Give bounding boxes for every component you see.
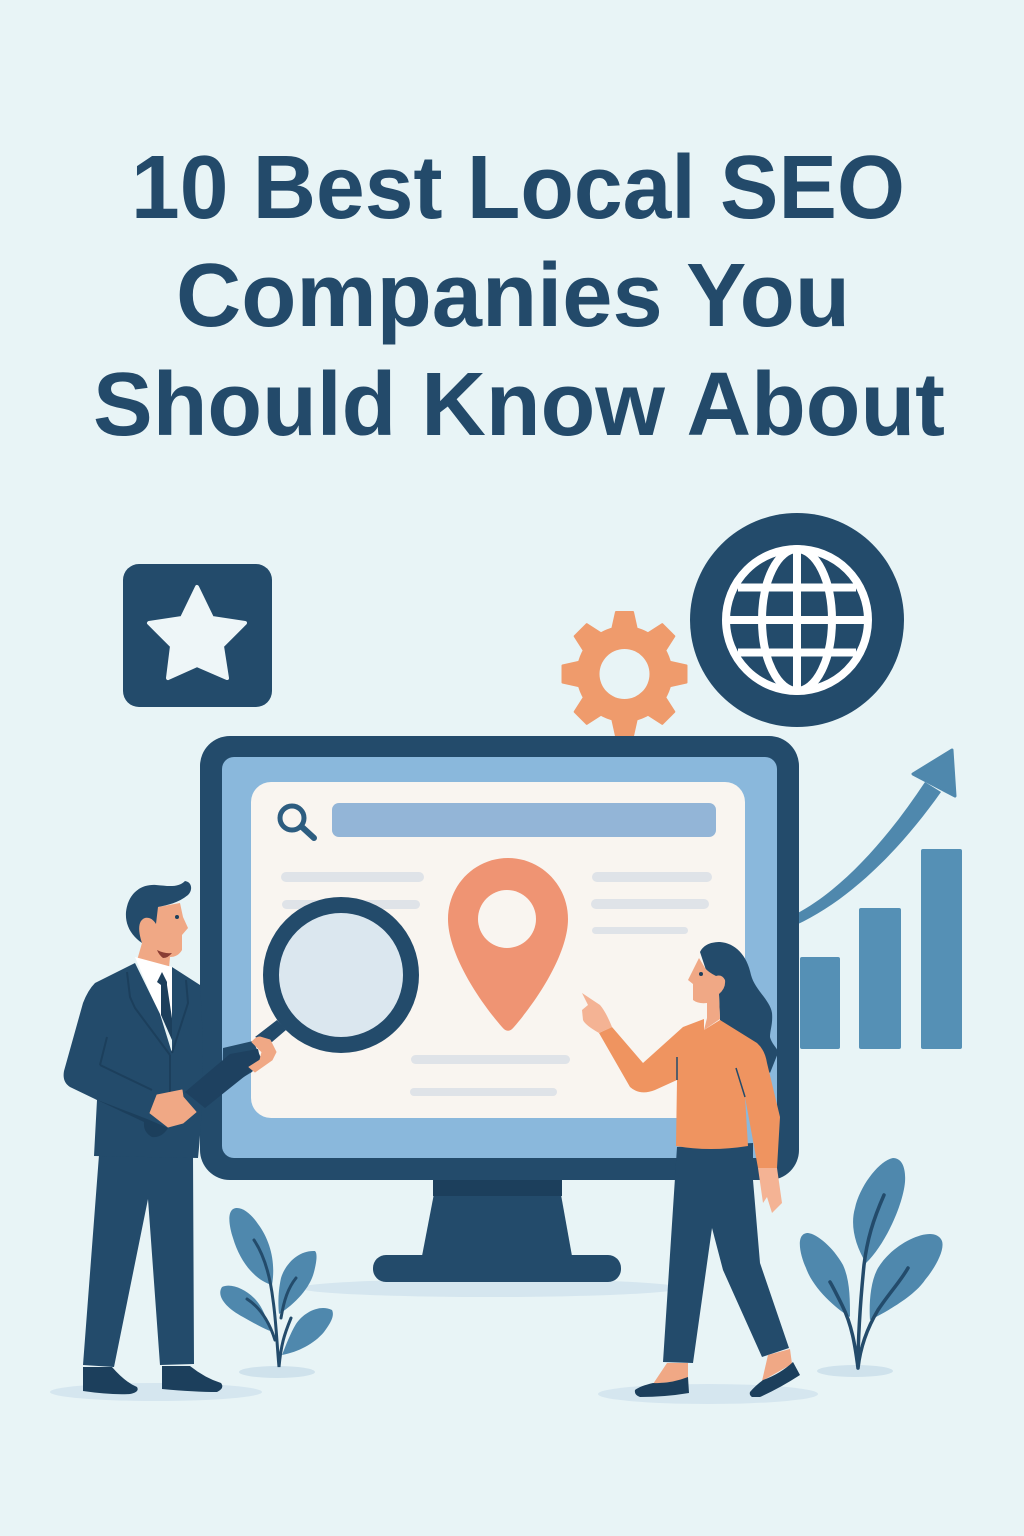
lapels and folds <box>100 972 188 1100</box>
title: Should Know About <box>93 355 945 455</box>
neck and face <box>134 903 188 968</box>
icon: gear <box>562 612 686 736</box>
monitor stand <box>373 1178 621 1282</box>
hair <box>700 942 778 1073</box>
person: man with magnifier <box>50 881 411 1401</box>
title <box>93 138 945 455</box>
title: Companies You <box>176 246 850 346</box>
sleeve cuff <box>95 1099 168 1137</box>
ankles <box>653 1349 792 1384</box>
bar chart <box>800 849 962 1049</box>
browser page <box>251 782 745 1118</box>
sweater folds <box>677 1057 745 1097</box>
person: woman pointing <box>582 942 818 1404</box>
growth arrow <box>796 750 955 925</box>
icon: globe <box>690 513 904 727</box>
eye <box>699 972 703 976</box>
lower hand <box>758 1168 782 1213</box>
plant: left <box>220 1208 333 1378</box>
pointing hand <box>582 993 612 1033</box>
raised hand <box>249 1037 276 1072</box>
icon: map pin <box>448 858 568 1031</box>
search bar <box>332 803 716 837</box>
eye and mouth <box>175 915 179 919</box>
ground shadow <box>50 1383 262 1401</box>
tie <box>157 972 173 1040</box>
monitor screen <box>222 757 777 1158</box>
hair <box>126 881 191 943</box>
shirt <box>135 957 173 1025</box>
face and neck <box>688 958 725 1030</box>
icon: star badge <box>123 564 272 707</box>
shoes <box>635 1362 800 1397</box>
plant: right <box>800 1158 943 1377</box>
right arm <box>185 1041 262 1108</box>
stand shadow <box>300 1279 680 1297</box>
icon: search <box>280 806 314 838</box>
shoes <box>83 1366 222 1394</box>
text lines <box>281 872 712 1096</box>
title: 10 Best Local SEO <box>131 138 905 238</box>
ground shadow <box>598 1384 818 1404</box>
trousers <box>663 1143 789 1363</box>
jacket <box>64 963 203 1158</box>
lower hand <box>150 1090 196 1127</box>
monitor frame <box>200 736 799 1180</box>
trousers <box>83 1155 194 1367</box>
sweater <box>599 1019 780 1168</box>
magnifier <box>255 905 411 1045</box>
monitor <box>200 736 799 1282</box>
